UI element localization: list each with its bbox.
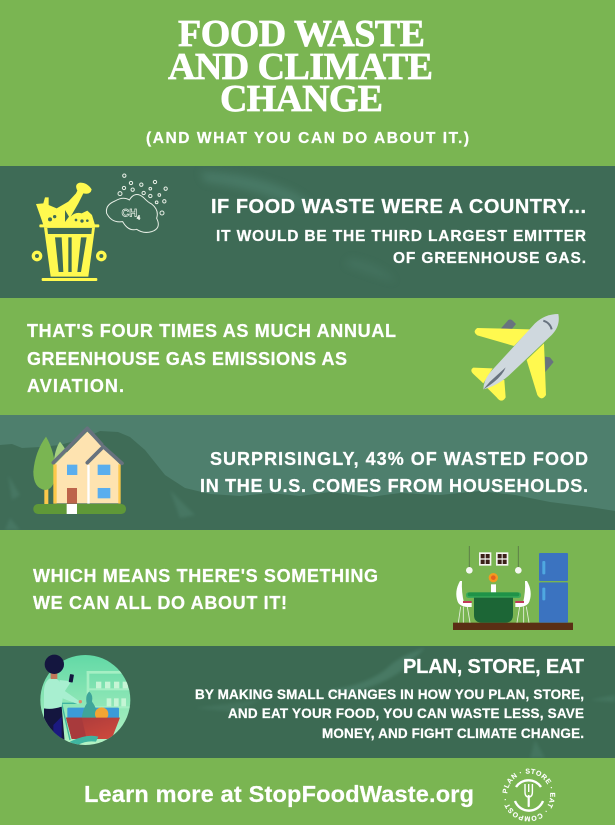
text: households statistic	[200, 449, 588, 496]
icon: airplane	[471, 314, 559, 401]
text: plan store eat detail: BY MAKING SMALL CHANGES IN HOW YOU PLAN, STORE,	[195, 687, 584, 702]
title: FOOD WASTE	[178, 13, 425, 55]
icon: methane cloud: CH	[122, 208, 137, 220]
text: plan store eat detail: AND EAT YOUR FOOD, YOU CAN WASTE LESS, SAVE	[228, 706, 584, 721]
panel: aviation	[27, 314, 559, 401]
text: country detail: OF GREENHOUSE GAS.	[393, 250, 586, 267]
title: CHANGE	[220, 78, 383, 120]
text: aviation comparison: AVIATION.	[27, 376, 124, 396]
text: country detail: IT WOULD BE THE THIRD LARGEST EMITTER	[216, 228, 586, 245]
text: country detail	[216, 228, 586, 267]
text: aviation comparison: GREENHOUSE GAS EMISSIONS AS	[27, 349, 347, 369]
footer link: Learn more at StopFoodWaste.org	[84, 781, 474, 807]
icon: methane cloud: 4	[137, 215, 140, 221]
title: AND CLIMATE	[168, 46, 433, 88]
title	[168, 13, 433, 120]
panel: households	[0, 415, 615, 530]
icon: kitchen	[453, 546, 573, 630]
text: aviation comparison	[27, 321, 396, 396]
text: plan store eat heading: PLAN, STORE, EAT	[403, 656, 584, 678]
icon: house	[33, 428, 126, 514]
subtitle: (AND WHAT YOU CAN DO ABOUT IT.)	[146, 130, 469, 147]
panel: plan store eat	[0, 646, 615, 758]
icon: methane cloud	[106, 174, 167, 232]
text: aviation comparison: THAT'S FOUR TIMES AS MUCH ANNUAL	[27, 321, 396, 341]
icon: shopper	[40, 655, 130, 747]
mountains backdrop	[0, 431, 615, 530]
text: something we can do: WHICH MEANS THERE'S SOMETHING	[33, 566, 378, 586]
text: plan store eat detail	[195, 687, 584, 741]
text: something we can do	[33, 566, 378, 613]
text: something we can do: WE CAN ALL DO ABOUT IT!	[33, 593, 287, 613]
text: households statistic: IN THE U.S. COMES FROM HOUSEHOLDS.	[200, 476, 588, 496]
text: households statistic: SURPRISINGLY, 43% OF WASTED FOOD	[210, 449, 588, 469]
panel: call to action	[33, 546, 573, 630]
icon: plan store eat compost badge: PLAN · STORE · EAT · COMPOST ·	[502, 768, 556, 822]
text: country heading: IF FOOD WASTE WERE A COUNTRY...	[211, 196, 586, 218]
text: plan store eat detail: MONEY, AND FIGHT CLIMATE CHANGE.	[322, 726, 584, 741]
icon: food waste bin	[33, 183, 105, 281]
panel: country	[0, 166, 615, 298]
